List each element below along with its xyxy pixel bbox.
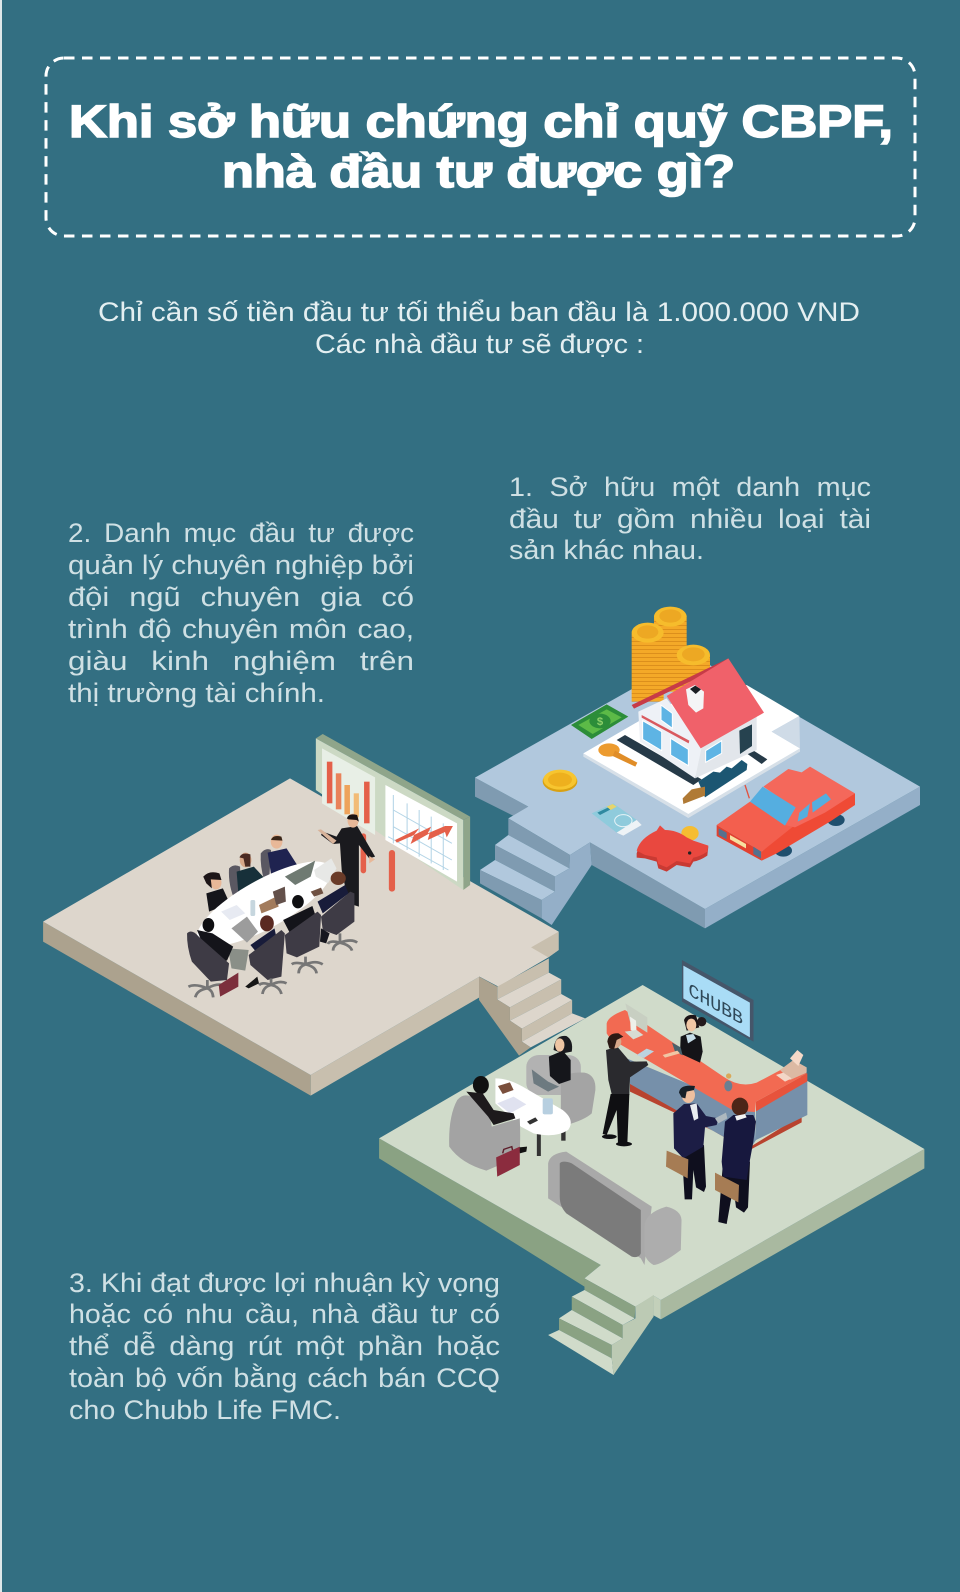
right chair bbox=[318, 872, 357, 951]
text block 1: đầu tư gồm nhiều loại tài bbox=[509, 504, 871, 534]
platform slab bbox=[379, 985, 924, 1319]
text block 2: trình độ chuyên môn cao, bbox=[68, 614, 414, 644]
text block 3 bbox=[69, 1268, 500, 1425]
meeting table bbox=[186, 846, 343, 971]
woman on laptop bbox=[532, 1036, 572, 1092]
icon: banknote bbox=[571, 704, 628, 739]
icon: banknote: $ bbox=[597, 716, 604, 728]
icon: pen road bbox=[617, 735, 767, 804]
line chart with arrow bbox=[388, 795, 453, 870]
intro text: Các nhà đầu tư sẽ được : bbox=[315, 329, 644, 359]
icon: red briefcase bbox=[496, 1147, 520, 1177]
man armchair bbox=[449, 1076, 527, 1171]
left woman chair bbox=[245, 915, 287, 994]
text block 2: quản lý chuyên nghiệp bởi bbox=[68, 550, 414, 580]
text block 1: 1. Sở hữu một danh mục bbox=[509, 472, 871, 502]
coffee table bbox=[495, 1078, 571, 1156]
text block 3: thể dễ dàng rút một phần hoặc bbox=[69, 1330, 500, 1361]
text block 2: 2. Danh mục đầu tư được bbox=[68, 518, 414, 548]
lounge and visitors bbox=[449, 1036, 682, 1265]
text block 3: toàn bộ vốn bằng cách bán CCQ bbox=[69, 1362, 500, 1393]
house lot bbox=[583, 685, 800, 818]
sofa bbox=[548, 1152, 682, 1265]
man with briefcase bbox=[666, 1086, 727, 1199]
icon: flower vase bbox=[724, 1073, 732, 1091]
icon: key bbox=[598, 743, 637, 767]
receptionist bbox=[663, 1015, 706, 1063]
text block 2: thị trường tài chính. bbox=[68, 678, 325, 708]
icon: briefcase bbox=[219, 973, 238, 997]
presenter bbox=[318, 814, 395, 907]
man with navy suit bbox=[715, 1098, 756, 1224]
icon: house bbox=[632, 658, 764, 778]
panel: meeting stairs bbox=[479, 958, 585, 1056]
text block 1 bbox=[509, 472, 871, 565]
title: nhà đầu tư được gì? bbox=[222, 146, 735, 197]
back attendees bbox=[203, 835, 299, 912]
seated man bbox=[466, 1076, 527, 1153]
front left chair bbox=[187, 918, 233, 997]
text block 2: giàu kinh nghiệm trên bbox=[68, 646, 414, 676]
text block 1: sản khác nhau. bbox=[509, 535, 704, 565]
icon: cash register bbox=[776, 1050, 807, 1082]
title bbox=[69, 96, 893, 197]
customer with tablet bbox=[602, 1033, 654, 1146]
icon: piggy bank bbox=[637, 825, 708, 872]
title: Khi sở hữu chứng chỉ quỹ CBPF, bbox=[69, 96, 893, 147]
front chairs and attendees bbox=[187, 872, 357, 997]
middle chair bbox=[283, 895, 323, 973]
text block 2 bbox=[68, 518, 414, 708]
icon: coin stacks bbox=[632, 607, 710, 702]
woman armchair bbox=[526, 1036, 595, 1125]
panel: front desk platform bbox=[379, 960, 924, 1375]
title box bbox=[46, 58, 915, 236]
bar chart bbox=[327, 762, 370, 823]
text block 3: cho Chubb Life FMC. bbox=[69, 1395, 341, 1425]
icon: monitor bbox=[625, 1003, 647, 1039]
text block 3: 3. Khi đạt được lợi nhuận kỳ vọng bbox=[69, 1268, 500, 1298]
CHUBB sign bbox=[682, 960, 754, 1042]
platform slab bbox=[475, 655, 920, 928]
icon: gold coin bbox=[543, 770, 577, 792]
icon: credit card bbox=[592, 803, 642, 836]
icon: car bbox=[717, 767, 855, 861]
CHUBB sign: CHUBB bbox=[688, 980, 743, 1031]
stairs bbox=[548, 1278, 654, 1375]
platform slab bbox=[43, 778, 559, 1096]
text block 3: hoặc có nhu cầu, nhà đầu tư có bbox=[69, 1299, 500, 1329]
panel: meeting platform bbox=[43, 734, 559, 1096]
panel: assets platform bbox=[475, 607, 920, 928]
whiteboard bbox=[316, 734, 470, 890]
intro text: Chỉ cần số tiền đầu tư tối thiểu ban đầu là 1.000.000 VND bbox=[98, 297, 860, 327]
stairs bbox=[480, 818, 592, 925]
text block 2: đội ngũ chuyên gia có bbox=[68, 582, 414, 612]
reception desk bbox=[602, 1003, 807, 1224]
intro text bbox=[98, 297, 860, 359]
